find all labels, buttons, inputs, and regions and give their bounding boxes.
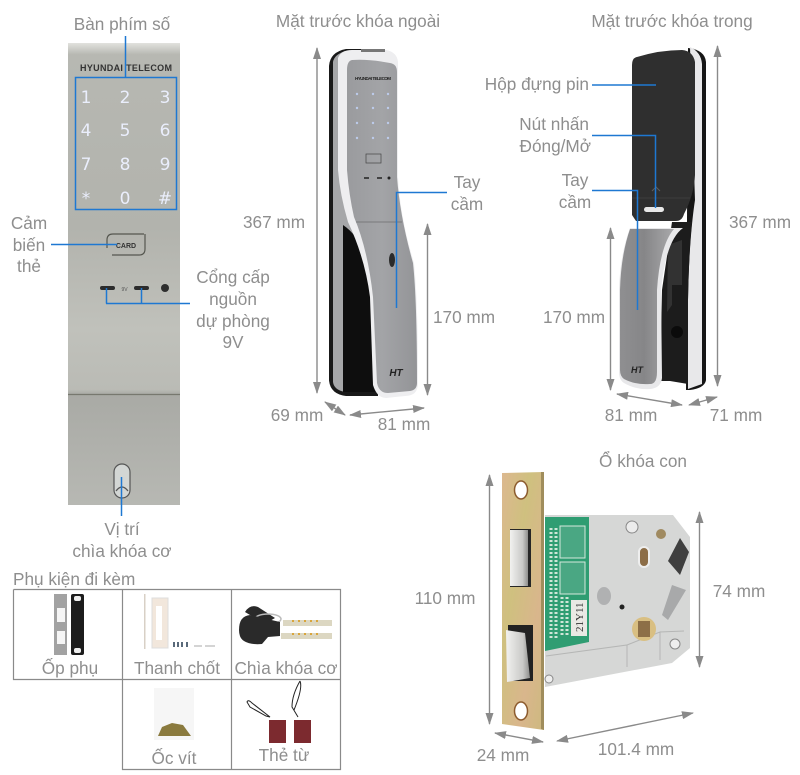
keypad digits: 2 bbox=[120, 88, 130, 108]
accessory: Ốp phụ bbox=[42, 594, 98, 678]
product: mortise lock bbox=[502, 472, 690, 730]
green label bbox=[545, 517, 589, 651]
accessory: Chìa khóa cơ bbox=[234, 606, 338, 678]
callout: Hộp đựng pin: Hộp đựng pin bbox=[485, 74, 589, 94]
dimension: 69 mm: 69 mm bbox=[271, 405, 323, 425]
keypad digits bbox=[81, 88, 172, 209]
card sensor bbox=[107, 234, 145, 255]
keypad digits: 0 bbox=[120, 189, 130, 209]
heading: Mặt trước khóa ngoài: Mặt trước khóa ngoài bbox=[276, 11, 440, 31]
label: Bàn phím số: Bàn phím số bbox=[74, 14, 171, 34]
label: Cổng cấp nguồn dự phòng 9V: 9V bbox=[222, 332, 244, 352]
faceplate bbox=[502, 472, 544, 730]
keypad digits: 7 bbox=[81, 155, 91, 175]
accessory: Ốp phụ: Ốp phụ bbox=[42, 658, 98, 678]
inner handle bbox=[619, 228, 683, 389]
label: Cảm biến thẻ: thẻ bbox=[17, 256, 41, 276]
callout: Tay cầm (outer): cầm bbox=[451, 194, 483, 214]
dimension: 71 mm bbox=[689, 397, 762, 425]
small keypad bbox=[356, 93, 389, 139]
dimension: 367 mm outer: 367 mm bbox=[243, 212, 305, 232]
heading: Phụ kiện đi kèm: Phụ kiện đi kèm bbox=[13, 569, 135, 589]
callout: Tay cầm (inner): Tay bbox=[562, 170, 589, 190]
label: Vị trí chìa khóa cơ bbox=[72, 477, 172, 561]
dimension: 81 mm outer bbox=[350, 408, 430, 434]
faceplate brand: HYUNDAI TELECOM bbox=[355, 76, 391, 81]
dimension: 71 mm: 71 mm bbox=[710, 405, 762, 425]
label: Cảm biến thẻ: Cảm bbox=[11, 213, 47, 233]
dimension: 81 mm outer: 81 mm bbox=[378, 414, 430, 434]
dimension: 24 mm bbox=[477, 733, 543, 765]
handle logo: HT bbox=[389, 368, 404, 379]
callout: Nút nhấn Đóng/Mở: Đóng/Mở bbox=[520, 136, 591, 156]
dimension: 74 mm: 74 mm bbox=[713, 581, 765, 601]
accessory: Thanh chốt: Thanh chốt bbox=[134, 658, 220, 678]
green label: 21Y11 bbox=[574, 602, 586, 632]
callout: Nút nhấn Đóng/Mở: Nút nhấn bbox=[519, 114, 589, 134]
callout: Tay cầm (outer): Tay bbox=[454, 172, 481, 192]
accessory: Chìa khóa cơ: Chìa khóa cơ bbox=[234, 658, 338, 678]
open/close button bbox=[644, 207, 664, 212]
key slot bbox=[114, 464, 130, 498]
label: Vị trí chìa khóa cơ: Vị trí bbox=[104, 519, 140, 539]
accessories table bbox=[14, 590, 340, 770]
brand: Hyundai Telecom: HYUNDAI TELECOM bbox=[80, 63, 172, 73]
product: inner lock front: HT bbox=[631, 365, 644, 375]
accessory: Thẻ từ bbox=[247, 681, 311, 765]
keypad digits: # bbox=[158, 189, 172, 209]
label: Cổng cấp nguồn dự phòng 9V: dự phòng bbox=[196, 311, 270, 331]
upper bolt bbox=[510, 529, 531, 587]
backup power contacts bbox=[100, 284, 169, 293]
keypad digits: 3 bbox=[160, 88, 170, 108]
heading: Ổ khóa con: Ổ khóa con bbox=[599, 451, 687, 471]
label: Bàn phím số bbox=[74, 14, 176, 210]
product: outer lock front bbox=[329, 49, 418, 398]
label: Cổng cấp nguồn dự phòng 9V: nguồn bbox=[209, 289, 257, 309]
label: Cổng cấp nguồn dự phòng 9V: Cổng cấp bbox=[196, 267, 270, 287]
dimension: 170 mm outer: 170 mm bbox=[433, 307, 495, 327]
callout: Tay cầm (outer) bbox=[396, 172, 483, 308]
label: Vị trí chìa khóa cơ: chìa khóa cơ bbox=[72, 541, 172, 561]
dimension: 81 mm inner: 81 mm bbox=[605, 405, 657, 425]
card sensor: CARD bbox=[116, 243, 136, 250]
accessory: Thẻ từ: Thẻ từ bbox=[259, 745, 309, 765]
dimension: 24 mm: 24 mm bbox=[477, 745, 529, 765]
label: Cảm biến thẻ bbox=[11, 213, 117, 276]
backup power contacts: 9V bbox=[121, 287, 128, 293]
dimension: 101.4 mm bbox=[557, 713, 693, 759]
dimension: 69 mm bbox=[271, 402, 345, 425]
accessory: Thanh chốt bbox=[134, 594, 220, 678]
callout: Nút nhấn Đóng/Mở bbox=[519, 114, 656, 208]
case details bbox=[545, 521, 689, 683]
callout: Tay cầm (inner): cầm bbox=[559, 192, 591, 212]
keypad digits: 6 bbox=[160, 121, 170, 141]
label: Cổng cấp nguồn dự phòng 9V bbox=[106, 267, 270, 352]
label: Cảm biến thẻ: biến bbox=[13, 235, 45, 255]
keypad digits: * bbox=[82, 189, 90, 209]
accessory: Ốc vít bbox=[152, 688, 197, 768]
keypad digits: 5 bbox=[120, 121, 130, 141]
dimension: 81 mm inner bbox=[605, 394, 682, 425]
latch bolt bbox=[508, 625, 533, 681]
keypad digits: 4 bbox=[81, 121, 91, 141]
dimension: 101.4 mm: 101.4 mm bbox=[598, 739, 674, 759]
product: inner lock front bbox=[619, 47, 706, 390]
dimension: 170 mm inner: 170 mm bbox=[543, 307, 605, 327]
dimension: 367 mm inner: 367 mm bbox=[729, 212, 791, 232]
lock case bbox=[545, 515, 690, 687]
keypad digits: 1 bbox=[81, 88, 91, 108]
panel: keypad close-up bbox=[68, 43, 180, 505]
callout: Tay cầm (inner) bbox=[559, 170, 638, 310]
keypad digits: 8 bbox=[120, 155, 130, 175]
accessory: Ốc vít: Ốc vít bbox=[152, 748, 197, 768]
dimension: 110 mm: 110 mm bbox=[415, 588, 475, 608]
heading: Mặt trước khóa trong: Mặt trước khóa trong bbox=[591, 11, 753, 31]
keypad digits: 9 bbox=[160, 155, 170, 175]
